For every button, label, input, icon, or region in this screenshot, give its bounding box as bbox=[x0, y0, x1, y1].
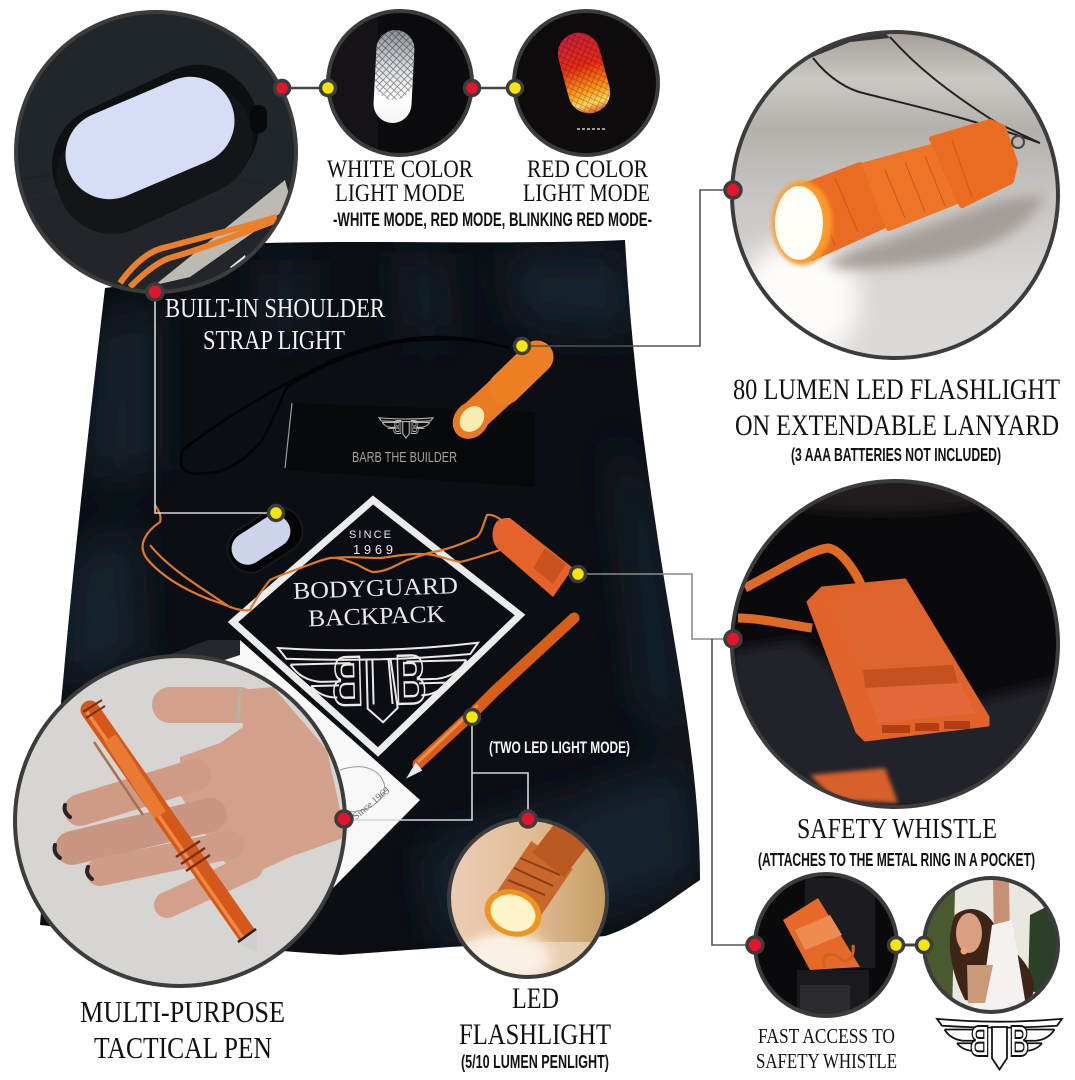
photo circle: woman blowing whistle bbox=[922, 876, 1062, 1016]
label: white color light mode: WHITE COLOR bbox=[327, 156, 473, 183]
penlight body bbox=[518, 855, 552, 905]
backpack diamond badge: 1969 bbox=[353, 542, 393, 557]
label: built-in shoulder strap light bbox=[165, 293, 385, 355]
face bbox=[956, 913, 982, 953]
label: led flashlight: LED bbox=[512, 982, 559, 1015]
shoulder strap light bbox=[226, 507, 304, 574]
label: led flashlight: FLASHLIGHT bbox=[459, 1018, 611, 1051]
lanyard cord bbox=[181, 337, 510, 474]
light housing bbox=[52, 64, 258, 191]
wing logo bbox=[278, 639, 480, 725]
tactical pen bbox=[410, 618, 574, 775]
backpack diamond badge bbox=[233, 500, 520, 752]
label: safety whistle: SAFETY WHISTLE bbox=[797, 813, 997, 845]
black drawstring bag bbox=[30, 230, 710, 960]
label: red color light mode: RED COLOR bbox=[527, 156, 648, 183]
photo circle: red light mode bbox=[510, 8, 660, 158]
penlight lens bbox=[478, 881, 548, 945]
bodyguard text: BODYGUARD bbox=[293, 573, 458, 605]
instruction card bbox=[150, 640, 420, 888]
wing logo: B bbox=[331, 642, 364, 721]
small flashlight bbox=[445, 357, 537, 446]
brand logo bottom right: B bbox=[970, 1016, 990, 1065]
label: white color light mode: LIGHT MODE bbox=[335, 180, 465, 207]
photo circle: led penlight bbox=[447, 817, 609, 982]
card logo text: Since 1969 bbox=[351, 785, 392, 822]
label: white color light mode bbox=[327, 156, 473, 207]
label: built-in shoulder strap light: BUILT-IN SHOULDER bbox=[165, 293, 385, 323]
brand logo bottom right bbox=[937, 1016, 1062, 1070]
photo circle: white light mode bbox=[325, 8, 475, 158]
label: 80 lumen led flashlight bbox=[733, 373, 1060, 465]
label: safety whistle bbox=[758, 813, 1035, 870]
whistle cord bbox=[143, 505, 505, 610]
label: led flashlight bbox=[459, 982, 611, 1072]
label: red color light mode bbox=[523, 156, 650, 207]
pen clip bbox=[94, 742, 143, 815]
label: fast access to safety whistle: SAFETY WHISTLE bbox=[756, 1049, 897, 1073]
backpack text: BACKPACK bbox=[308, 602, 446, 632]
connector dots bbox=[147, 80, 932, 953]
light lens bbox=[66, 76, 234, 200]
photo circle: led flashlight on lanyard bbox=[730, 28, 1060, 360]
photo circle: whistle in pocket bbox=[754, 872, 899, 1018]
flashlight lens bbox=[772, 181, 832, 265]
hair bbox=[950, 909, 1034, 1005]
orange cord bbox=[120, 217, 277, 287]
label: multi-purpose tactical pen bbox=[80, 994, 285, 1065]
photo circle: tactical pen on hand bbox=[12, 654, 348, 988]
label: multi-purpose tactical pen: TACTICAL PEN bbox=[94, 1030, 272, 1065]
raised arm bbox=[1001, 880, 1002, 942]
pen body bbox=[90, 710, 247, 935]
box logo bbox=[379, 418, 433, 439]
brand logo bottom right: B bbox=[1010, 1016, 1029, 1065]
whistle body bbox=[808, 580, 988, 740]
box brand: BARB THE BUILDER bbox=[352, 449, 457, 466]
hand bbox=[72, 687, 346, 905]
label: red color light mode: LIGHT MODE bbox=[523, 180, 650, 207]
label: led flashlight: (5/10 LUMEN PENLIGHT) bbox=[461, 1052, 609, 1072]
photo circle: shoulder strap light close-up bbox=[10, 5, 300, 300]
label: fast access to safety whistle: FAST ACCESS TO bbox=[758, 1024, 895, 1048]
since text: SINCE bbox=[349, 529, 391, 541]
label: light modes: -WHITE MODE, RED MODE, BLINKING RED MODE- bbox=[333, 210, 652, 231]
gift box bbox=[285, 403, 535, 487]
label: fast access to safety whistle bbox=[756, 1024, 897, 1073]
whistle bbox=[492, 518, 573, 597]
ring bbox=[236, 689, 240, 722]
label: multi-purpose tactical pen: MULTI-PURPOSE bbox=[80, 994, 285, 1029]
connector lines bbox=[155, 88, 924, 945]
label: two led light mode: (TWO LED LIGHT MODE) bbox=[489, 738, 630, 757]
pen tip bbox=[240, 930, 258, 953]
box logo: B bbox=[410, 418, 419, 439]
cords bbox=[745, 548, 863, 590]
box logo: B bbox=[393, 418, 402, 439]
flashlight body bbox=[793, 122, 1015, 258]
scarf bbox=[967, 965, 993, 1003]
photo circle: safety whistle close-up bbox=[730, 468, 1060, 810]
label: built-in shoulder strap light: STRAP LIGHT bbox=[203, 325, 345, 355]
wing logo: B bbox=[394, 641, 427, 720]
white blouse bbox=[973, 920, 1025, 1010]
